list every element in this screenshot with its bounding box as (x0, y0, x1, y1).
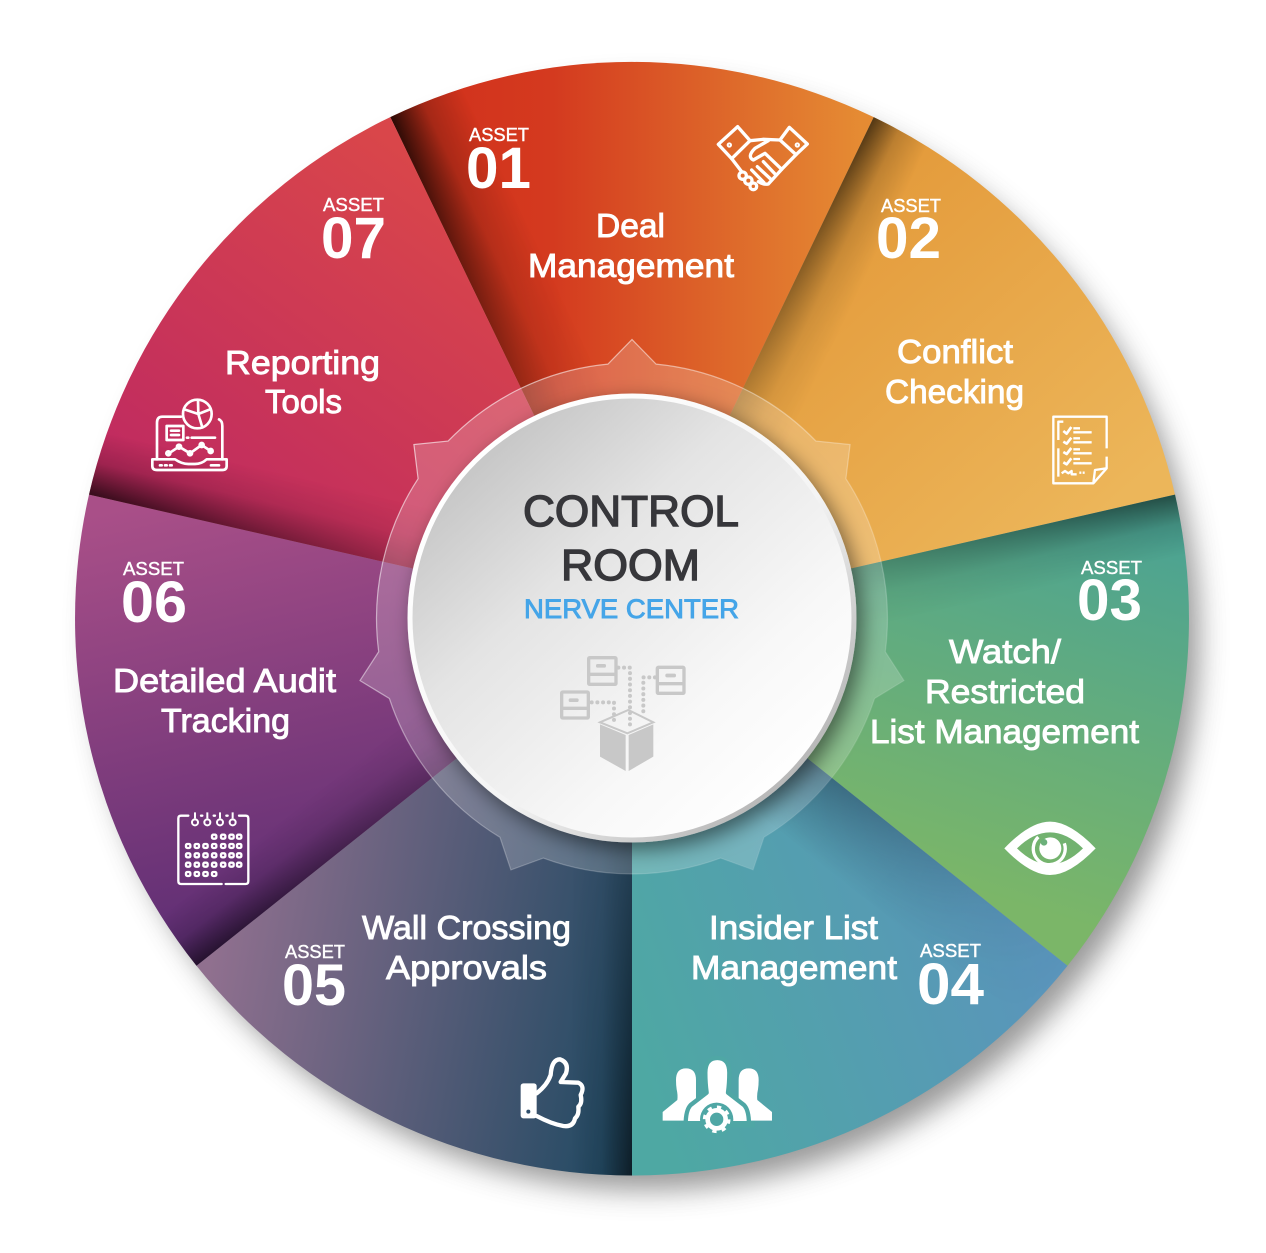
icon: checklist (1053, 417, 1107, 483)
label: watch restricted list management: Restricted (925, 673, 1085, 710)
panel: asset 02 conflict checking (730, 117, 1175, 568)
asset 01 number: ASSET (469, 125, 529, 145)
icon: calendar (178, 812, 248, 884)
asset 03 number: ASSET (1081, 558, 1142, 578)
label: reporting tools (225, 344, 380, 420)
asset 03 number: 03 (1077, 568, 1142, 633)
subtitle: nerve center: NERVE CENTER (524, 594, 739, 624)
label: conflict checking: Checking (885, 373, 1024, 410)
hub disc (410, 396, 854, 840)
wheel drop shadow (93, 84, 1199, 1190)
asset 05 number: 05 (282, 953, 346, 1018)
asset 06 number: 06 (121, 570, 187, 635)
panel: asset 03 watch restricted list (808, 494, 1189, 966)
icon: handshake (718, 127, 807, 190)
panel: center hub (410, 396, 854, 840)
label: deal management: Management (528, 247, 734, 284)
label: insider list management: Insider List (709, 909, 878, 946)
label: detailed audit tracking: Detailed Audit (113, 662, 336, 699)
panel: asset 04 insider list management (632, 758, 1068, 1176)
label: wall crossing approvals: Approvals (386, 949, 547, 986)
label: detailed audit tracking (113, 662, 336, 739)
label: watch restricted list management (870, 633, 1139, 750)
label: wall crossing approvals (362, 909, 571, 986)
wedge 01 (390, 62, 874, 416)
label: conflict checking (885, 333, 1024, 410)
label: insider list management (691, 909, 897, 986)
icon: thumbs up (521, 1059, 583, 1126)
wedge 03 (808, 494, 1189, 966)
asset 01 number: 01 (466, 136, 531, 201)
label: reporting tools: Reporting (225, 344, 380, 381)
asset 04 number: 04 (917, 952, 984, 1017)
icon: laptop report (152, 400, 227, 470)
translucent gear ring (360, 340, 904, 874)
asset 02 number: 02 (876, 206, 941, 271)
label: deal management: Deal (596, 207, 665, 244)
label: conflict checking: Conflict (897, 333, 1013, 370)
wedge 05 (196, 758, 632, 1176)
asset 06 number: ASSET (123, 559, 184, 579)
label: detailed audit tracking: Tracking (161, 702, 290, 739)
icon: team with gear (663, 1058, 772, 1136)
wedge 06 (75, 494, 457, 966)
asset 02 number: ASSET (881, 196, 941, 216)
label: wall crossing approvals: Wall Crossing (362, 909, 571, 946)
asset 05 number: ASSET (285, 942, 345, 962)
asset 04 number: ASSET (920, 941, 981, 961)
panel: asset 05 wall crossing approvals (196, 758, 632, 1176)
label: watch restricted list management: List Management (870, 713, 1139, 750)
wedge 07 (89, 117, 534, 568)
panel: asset 06 detailed audit tracking (75, 494, 457, 966)
title: control room: ROOM (561, 541, 700, 590)
panel: asset 01 deal management (390, 62, 874, 416)
label: insider list management: Management (691, 949, 897, 986)
asset 07 number: 07 (321, 206, 386, 271)
icon: network of boxes into cube (562, 658, 684, 771)
label: deal management (528, 207, 734, 284)
panel: asset 07 reporting tools (89, 117, 534, 568)
label: reporting tools: Tools (265, 383, 342, 420)
title: control room (523, 487, 739, 590)
wedge 02 (730, 117, 1175, 568)
icon: eye (1004, 822, 1096, 875)
wedge 04 (632, 758, 1068, 1176)
label: watch restricted list management: Watch/ (949, 633, 1062, 670)
title: control room: CONTROL (523, 487, 739, 536)
asset 07 number: ASSET (323, 195, 384, 215)
